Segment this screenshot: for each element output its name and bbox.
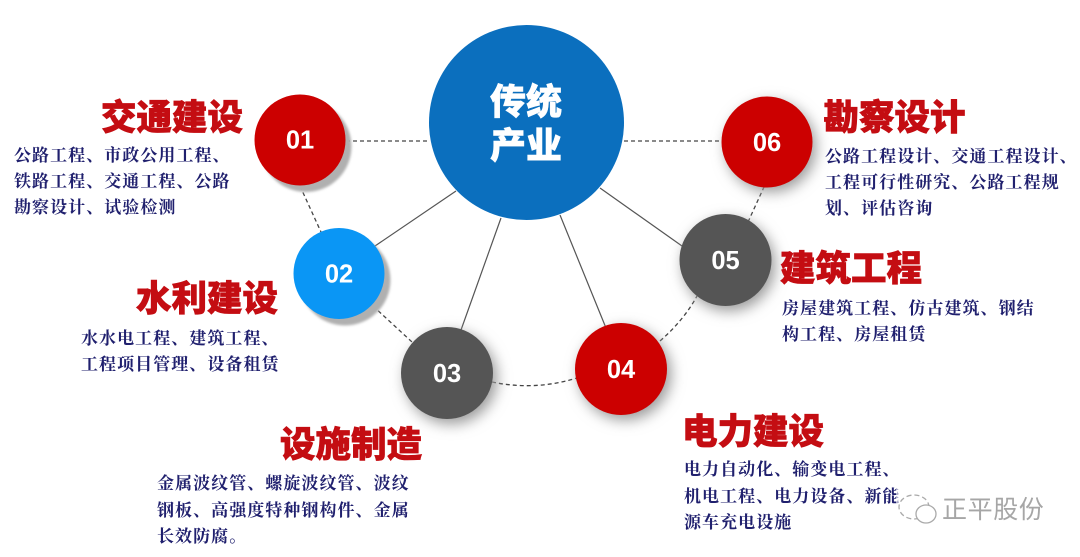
block 02: 水利建设: 水水电工程、建筑工程、: [81, 329, 280, 348]
block 01: 交通建设: 铁路工程、交通工程、公路: [14, 172, 231, 191]
connector lines: [300, 141, 764, 386]
block 04: 电力建设: 电力自动化、输变电工程、: [684, 459, 901, 479]
node 01: [254, 94, 352, 192]
block 03: 设施制造: 钢板、高强度特种钢构件、金属: [157, 500, 410, 520]
block 01: 交通建设: [14, 98, 243, 217]
node 04: 04: [607, 356, 636, 384]
node 01: 01: [286, 126, 314, 154]
node 02: 02: [325, 260, 353, 288]
block 04: 电力建设: 源车充电设施: [684, 512, 792, 532]
node 06: [722, 96, 816, 192]
central circle: 传统产业: 产业: [490, 125, 562, 166]
block 05: 建筑工程: 建筑工程: [780, 248, 922, 288]
block 01: 交通建设: 勘察设计、试验检测: [14, 197, 176, 217]
block 04: 电力建设: [682, 412, 901, 532]
block 01: 交通建设: 交通建设: [101, 98, 243, 138]
node 04: [575, 323, 671, 420]
block 06: 勘察设计: 勘察设计: [824, 98, 966, 138]
block 02: 水利建设: 水利建设: [136, 278, 278, 318]
block 03: 设施制造: [157, 424, 423, 546]
central circle: 传统产业: [429, 25, 624, 220]
block 04: 电力建设: 电力建设: [682, 412, 824, 452]
block 06: 勘察设计: 公路工程设计、交通工程设计、: [825, 147, 1078, 166]
block 03: 设施制造: 设施制造: [280, 424, 423, 464]
block 06: 勘察设计: [824, 98, 1078, 218]
watermark: 正平股份: [896, 488, 1050, 528]
block 03: 设施制造: 长效防腐。: [157, 526, 247, 546]
node 03: [401, 327, 497, 424]
block 06: 勘察设计: 工程可行性研究、公路工程规: [825, 172, 1060, 192]
block 05: 建筑工程: [780, 248, 1035, 344]
node 03: 03: [433, 360, 461, 388]
block 03: 设施制造: 金属波纹管、螺旋波纹管、波纹: [157, 473, 410, 493]
block 05: 建筑工程: 构工程、房屋租赁: [782, 324, 928, 344]
node 05: 05: [711, 247, 740, 275]
block 01: 交通建设: 公路工程、市政公用工程、: [14, 146, 231, 165]
central circle: 传统产业: 传统: [490, 81, 562, 122]
block 05: 建筑工程: 房屋建筑工程、仿古建筑、钢结: [782, 298, 1035, 318]
block 04: 电力建设: 机电工程、电力设备、新能: [684, 486, 901, 506]
node 06: 06: [753, 129, 781, 157]
block 02: 水利建设: [81, 278, 281, 374]
node 02: [294, 228, 390, 326]
block 06: 勘察设计: 划、评估咨询: [825, 199, 933, 218]
watermark: 正平股份: 正平股份: [942, 496, 1044, 524]
node 05: [680, 214, 775, 311]
block 02: 水利建设: 工程项目管理、设备租赁: [81, 354, 281, 374]
